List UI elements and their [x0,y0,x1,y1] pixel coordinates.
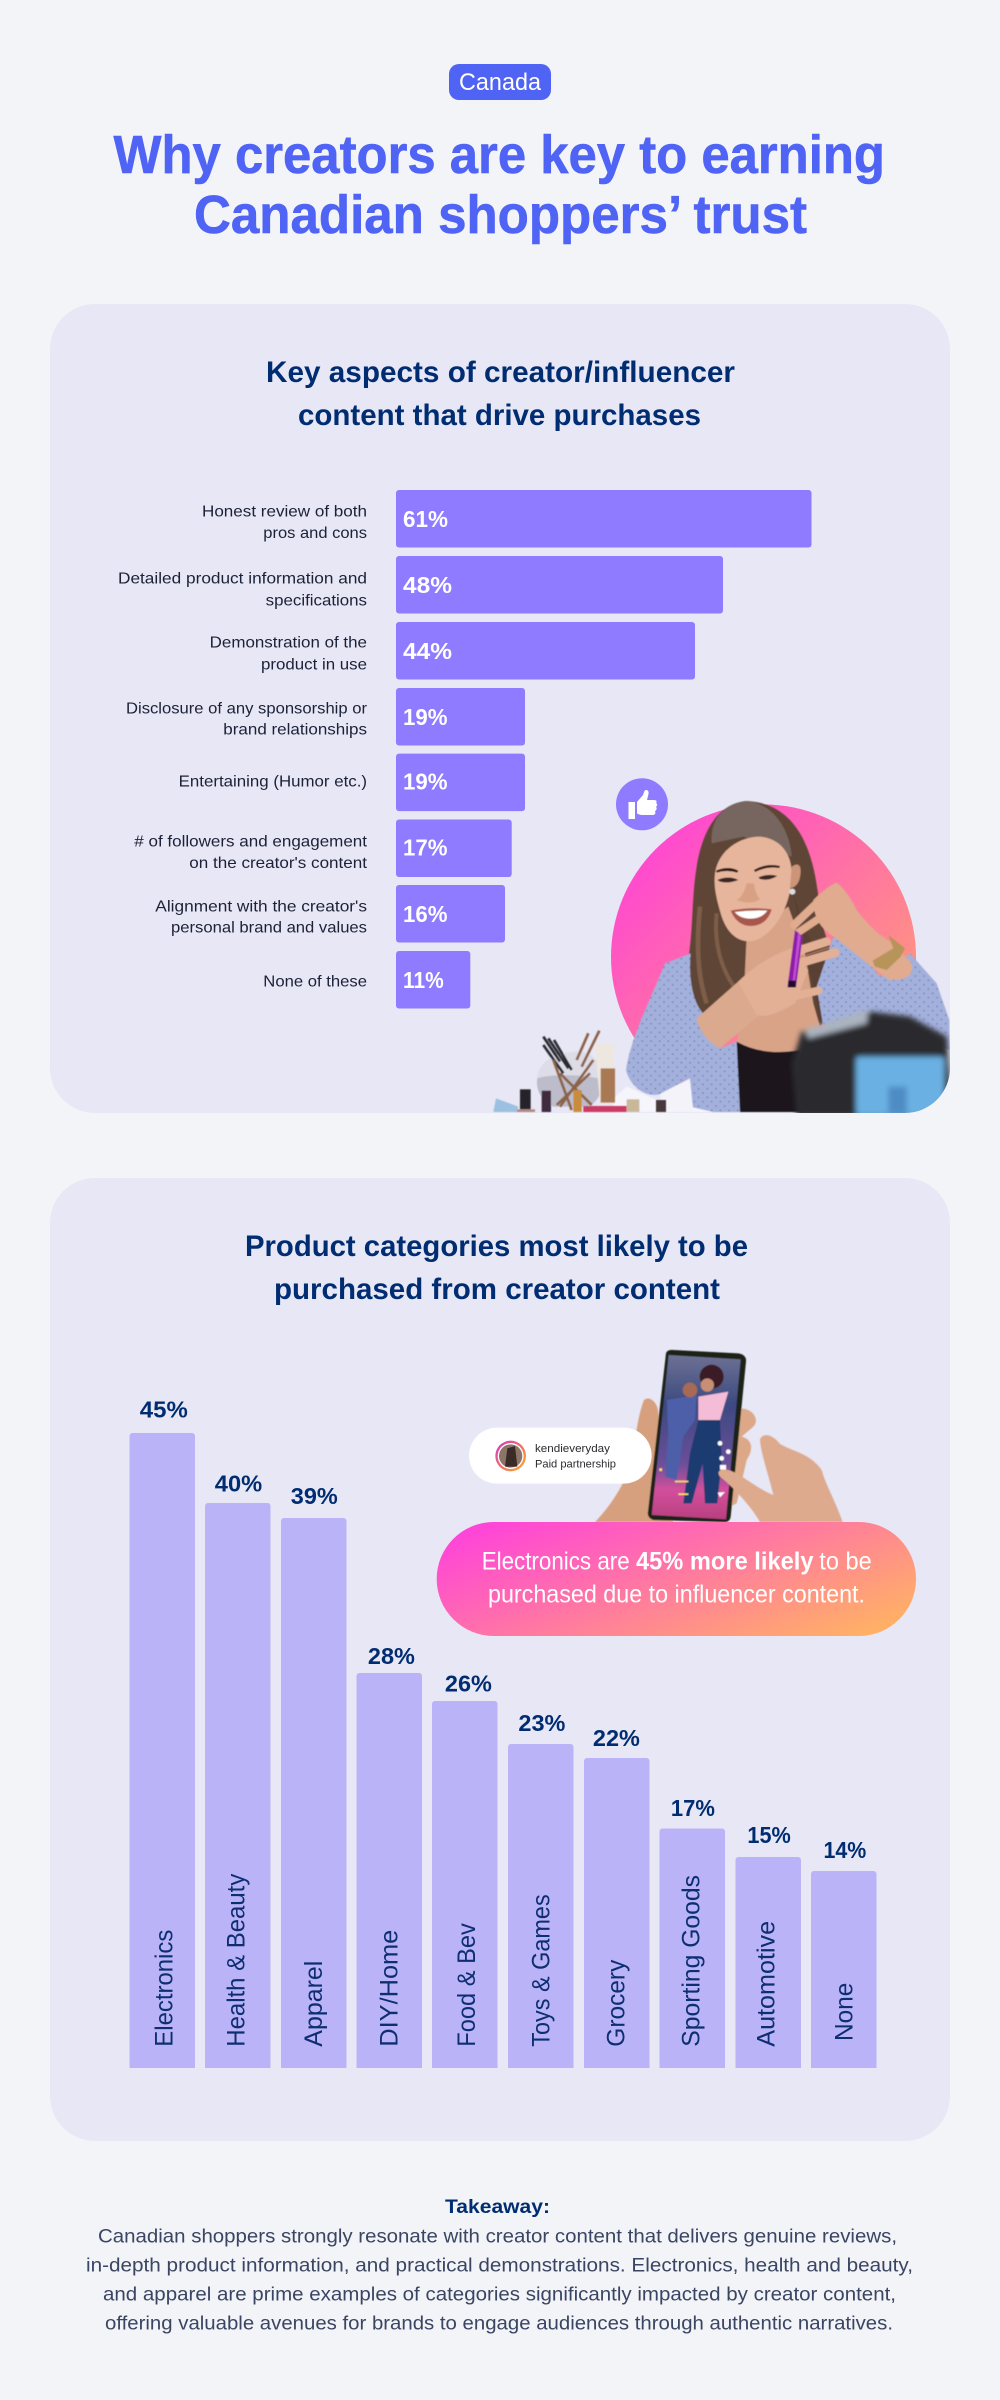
horizontal bar chart: aspects: 19% [403,704,448,730]
vertical bar chart: categories: 45% [140,1397,188,1423]
horizontal bar chart: aspects: 17% [403,835,448,861]
right hand and wrist [813,883,912,980]
wristwatch [873,935,905,970]
horizontal bar chart: aspects: Demonstration of the [210,634,367,652]
title: Canadian shoppers’ trust [194,185,807,245]
vertical bar chart: categories: None [831,1983,859,2041]
panel heading: key aspects: Key aspects of creator/influencer [266,356,735,389]
woman illustration [493,801,953,1117]
desk [613,1087,713,1112]
horizontal bar chart: aspects: 16% [403,901,448,927]
right hair [819,1023,822,1026]
takeaway text: offering valuable avenues for brands to engage audiences through authentic narratives. [105,2313,893,2335]
horizontal bar chart: aspects: Alignment with the creator's [155,898,367,915]
vertical bar chart: categories: 17% [671,1795,715,1821]
vertical bar chart: categories: Health & Beauty [222,1873,250,2047]
panel heading: key aspects: content that drive purchases [298,399,701,432]
face [715,837,792,941]
vertical bar chart: categories: 40% [215,1471,262,1497]
horizontal bar chart: aspects: pros and cons [263,525,367,542]
horizontal bar chart: aspects: 61% [403,506,448,532]
creator tag pill: Paid partnership [535,1458,616,1470]
vertical bar chart: categories: 39% [291,1483,338,1509]
vertical bar chart: categories: DIY/Home [375,1930,403,2047]
horizontal bar chart: aspects: brand relationships [223,721,367,738]
blurred camera [792,1009,953,1117]
vertical bar chart: categories: 26% [445,1670,492,1696]
horizontal bar chart: aspects: personal brand and values [171,920,367,936]
vertical bar chart: categories: Automotive [752,1921,780,2047]
horizontal bar chart: aspects: product in use [261,656,367,673]
horizontal bar chart: aspects: Disclosure of any sponsorship or [126,701,368,718]
panel heading: product categories: purchased from creator content [274,1273,720,1306]
vertical bar chart: categories: 22% [593,1725,640,1751]
badge: Canada: Canada [459,69,542,96]
creator tag pill: kendieveryday [535,1443,611,1455]
forearm and palm [696,980,745,1048]
takeaway text: and apparel are prime examples of categories significantly impacted by creator content, [103,2284,896,2306]
right hand [719,1435,843,1522]
callout: electronics 45% more likely: Electronics are [482,1547,630,1575]
horizontal bar chart: aspects: on the creator's content [189,855,368,872]
phone [648,1350,746,1522]
gradient circle [611,804,916,1110]
neck and chest [737,907,820,1053]
vertical bar chart: categories: 23% [518,1710,565,1736]
horizontal bar chart: aspects: Entertaining (Humor etc.) [179,773,367,790]
vertical bar chart: categories: Apparel [300,1961,328,2047]
horizontal bar chart: aspects: 44% [403,638,452,664]
vertical bar chart: categories: Toys & Games [528,1894,556,2047]
left hand [595,1399,673,1522]
vertical bar chart: categories [130,1397,876,2068]
panel heading: key aspects [266,356,735,432]
creator tag pill [469,1428,652,1484]
horizontal bar chart: aspects: 48% [403,572,452,598]
vertical bar chart: categories: Electronics [150,1930,178,2047]
callout: electronics 45% more likely [437,1522,916,1636]
vertical bar chart: categories: Grocery [602,1959,630,2047]
cosmetics on desk [493,1031,666,1112]
dancers on phone screen [665,1395,697,1480]
vertical bar chart: categories: Food & Bev [453,1923,481,2047]
horizontal bar chart: aspects: # of followers and engagement [134,833,368,850]
vertical bar chart: categories: 14% [824,1837,866,1863]
panel: product categories [50,1178,950,2141]
horizontal bar chart: aspects: 19% [403,769,448,795]
panel heading: product categories [245,1230,748,1306]
takeaway text: in-depth product information, and practical demonstrations. Electronics, health and beauty, [86,2255,913,2277]
icon: thumbs up [616,778,668,830]
horizontal bar chart: aspects [118,490,812,1008]
title [114,125,885,245]
panel heading: product categories: Product categories most likely to be [245,1230,748,1263]
takeaway text: Takeaway: [445,2196,550,2218]
panel: key aspects of creator content [50,304,953,1117]
vertical bar chart: categories: 28% [368,1643,415,1669]
black top [733,1042,803,1112]
title: Why creators are key to earning [114,125,885,185]
horizontal bar chart: aspects: None of these [263,973,367,990]
callout: electronics 45% more likely: purchased due to influencer content. [488,1581,865,1609]
callout: electronics 45% more likely: to be [819,1547,872,1575]
vertical bar chart: categories: Sporting Goods [678,1875,706,2047]
horizontal bar chart: aspects: Detailed product information and [118,571,367,588]
lipstick [787,930,803,987]
callout: electronics 45% more likely: 45% more likely [636,1547,814,1575]
photo: woman demonstrating lipstick on gradient circle [493,801,953,1117]
jacket [626,953,740,1112]
horizontal bar chart: aspects: Honest review of both [202,503,367,520]
horizontal bar chart: aspects: specifications [266,593,367,610]
takeaway text: Canadian shoppers strongly resonate with creator content that delivers genuine reviews, [98,2226,897,2248]
horizontal bar chart: aspects: 11% [403,967,444,993]
takeaway text [86,2196,913,2335]
badge: Canada [449,64,551,100]
vertical bar chart: categories: 15% [747,1822,791,1848]
photo: hands holding phone [469,1350,843,1522]
